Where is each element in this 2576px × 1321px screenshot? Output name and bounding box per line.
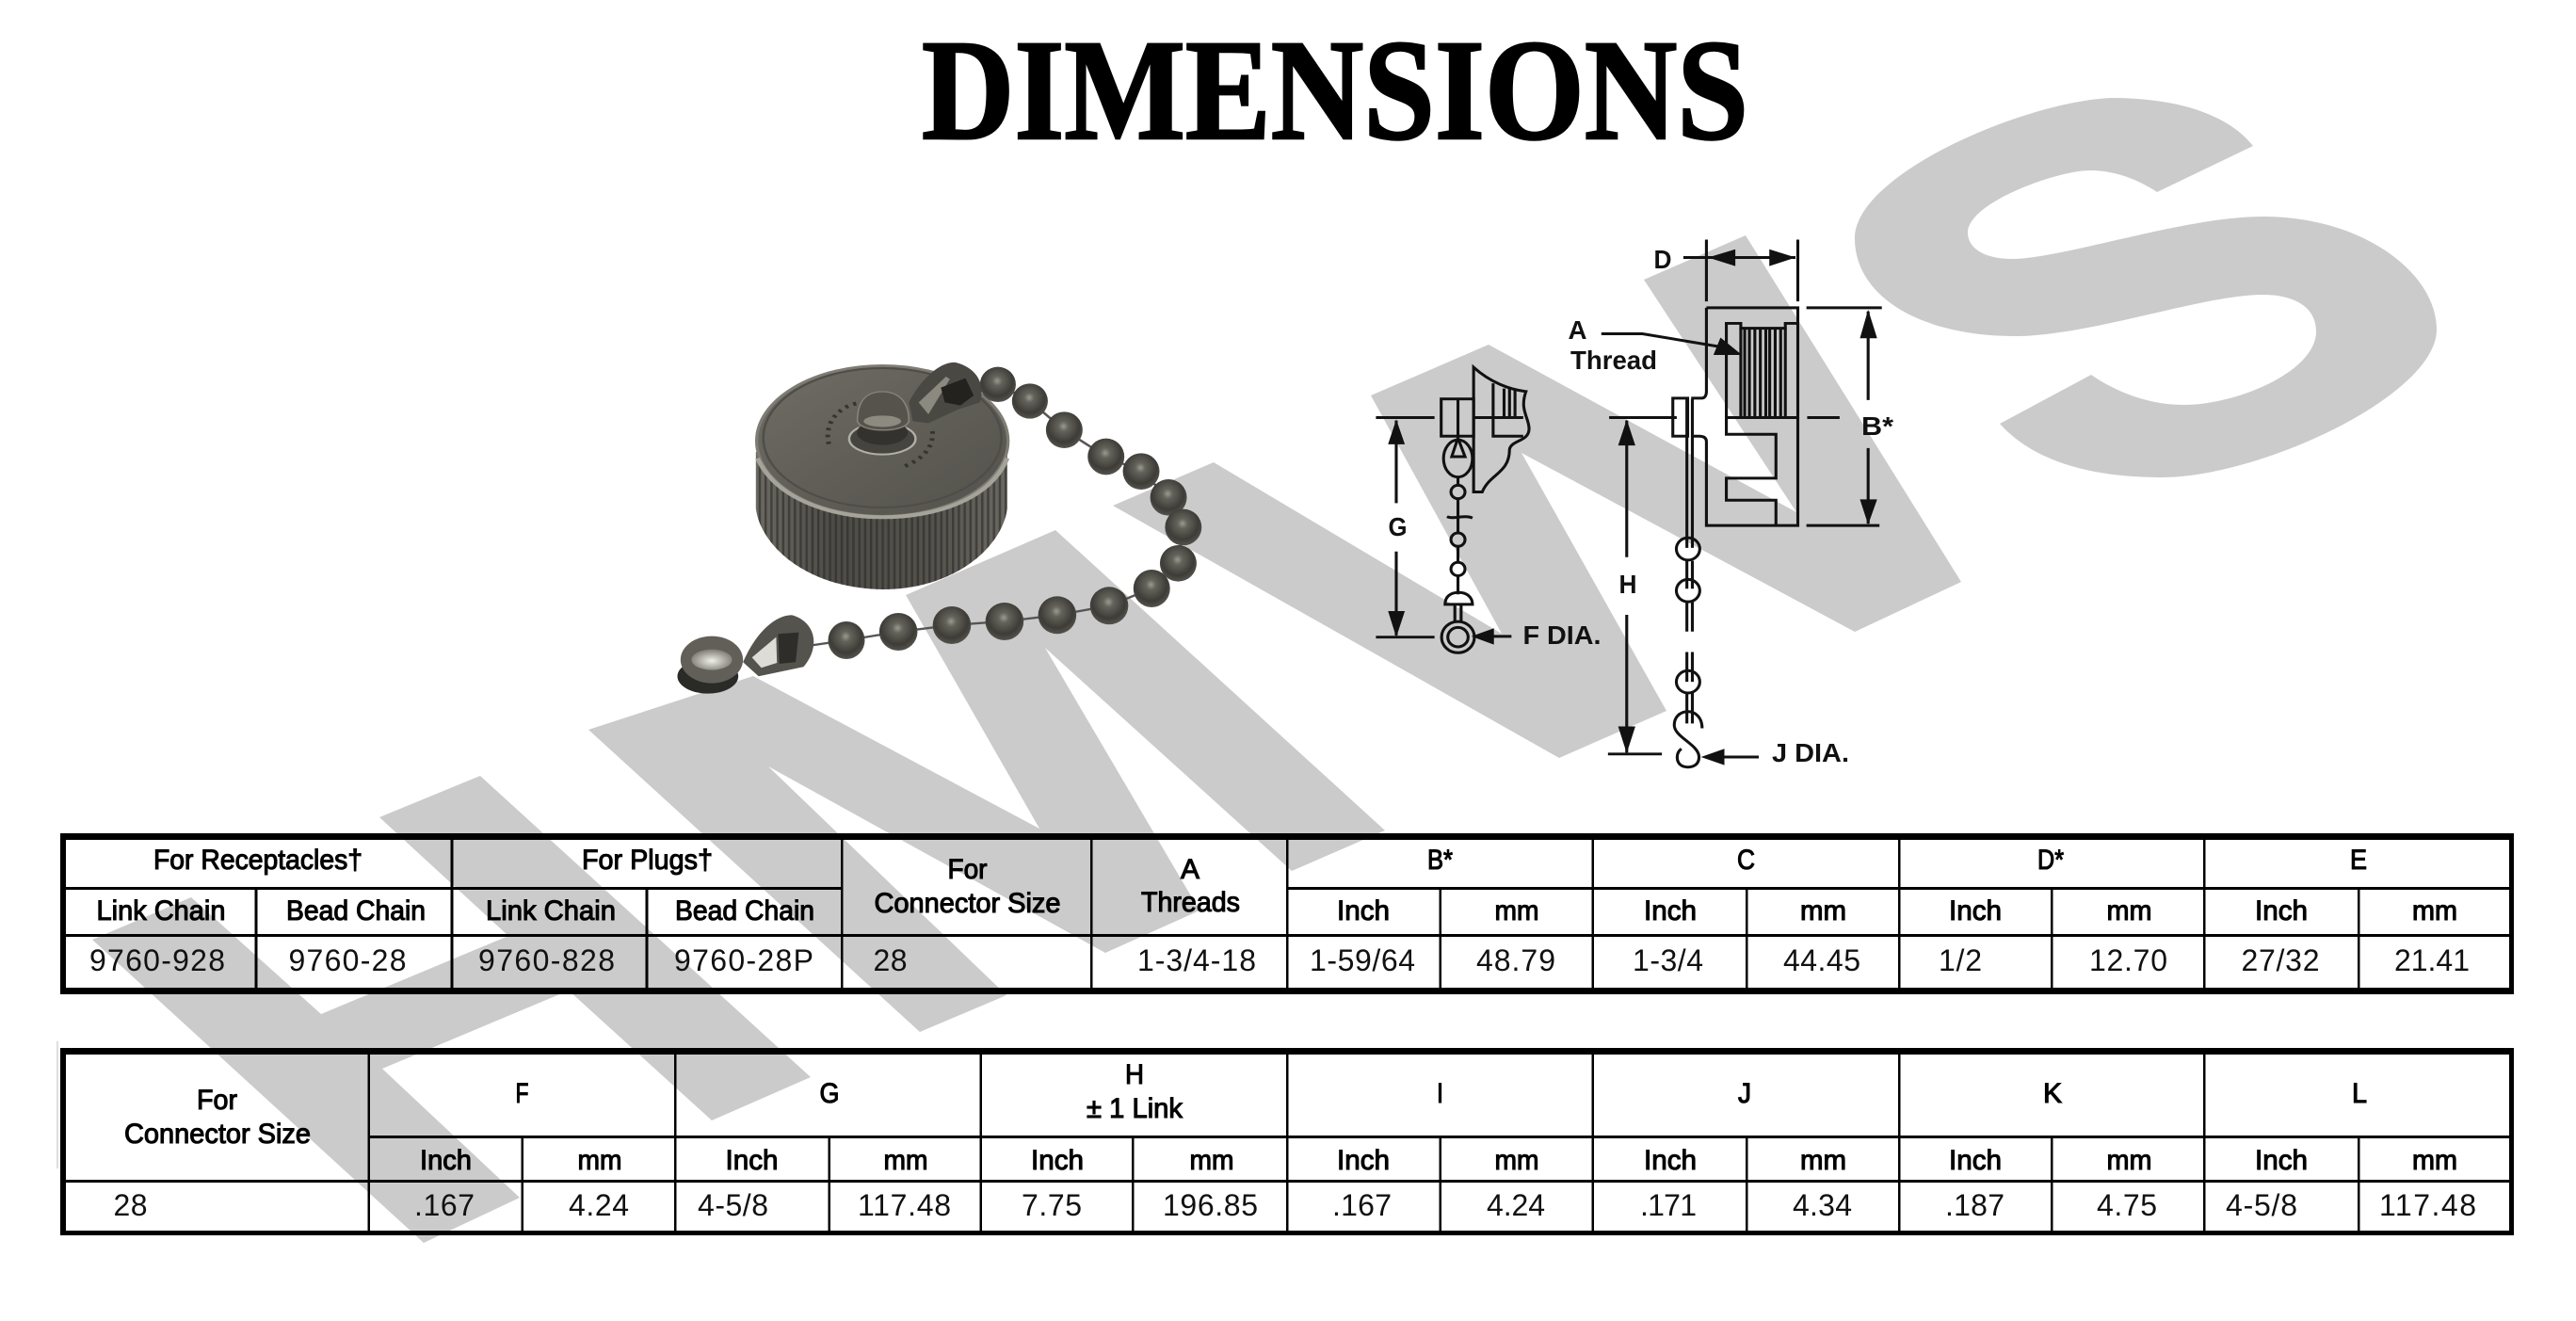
table 2 header: Inch [1644, 1145, 1697, 1176]
technical drawing: dimension diagrams [1376, 240, 1882, 767]
table 2 header: Inch [1949, 1145, 2002, 1176]
table 1 data row: 1-3/4-18 [1137, 943, 1256, 977]
table 2 data row: 117.48 [858, 1188, 951, 1222]
chain wire [803, 384, 1183, 647]
table 2 header [124, 1059, 2457, 1176]
table 2 header: Inch [2255, 1145, 2308, 1176]
table 1 data row: 44.45 [1783, 943, 1860, 977]
table 2 data row: .167 [1332, 1188, 1392, 1222]
table 2 data row: 4.24 [569, 1188, 629, 1222]
table 1 header: Bead Chain [286, 895, 426, 926]
table 2 header: H [1125, 1059, 1144, 1090]
right view: cap section with chain, dimensions A B D H J [1602, 240, 1882, 767]
table 1 header: Threads [1141, 887, 1240, 918]
table 2 header: mm [578, 1145, 621, 1176]
table 2 header: G [819, 1078, 840, 1109]
table 2 data row: 4.24 [1487, 1188, 1545, 1222]
table 1 header: Link Chain [486, 895, 616, 926]
watermark letter S [1855, 98, 2437, 477]
label G: G [1388, 512, 1407, 541]
table 2 data row [113, 1188, 2476, 1222]
table 1: part numbers and dimensions A-E [60, 833, 2514, 994]
arrow to F [1472, 628, 1511, 645]
plug body outline [1473, 367, 1529, 492]
table 1 data row: 9760-928 [89, 943, 225, 977]
table 1 data row: 1-59/64 [1310, 943, 1415, 977]
table 2 header: Inch [420, 1145, 472, 1176]
dimension H [1608, 419, 1662, 754]
table 2 data row: 4-5/8 [2226, 1188, 2297, 1222]
table 1 header: A [1181, 854, 1199, 885]
table 2 data row: .167 [414, 1188, 475, 1222]
table 2 header: K [2043, 1078, 2062, 1109]
arrow to thread A [1602, 334, 1742, 355]
ring F [1441, 621, 1474, 652]
table 2 data row: 28 [113, 1188, 147, 1222]
table 2 header: Inch [1031, 1145, 1084, 1176]
table 2 header: mm [1190, 1145, 1233, 1176]
table 1 data row: 48.79 [1476, 943, 1555, 977]
title: DIMENSIONS [922, 11, 1748, 170]
label H: H [1619, 570, 1636, 599]
cap centre post [849, 392, 915, 455]
table 2 data row: 117.48 [2379, 1188, 2476, 1222]
table 2 data row: 196.85 [1163, 1188, 1258, 1222]
table 2 header: Inch [725, 1145, 778, 1176]
table 2 header: mm [1800, 1145, 1846, 1176]
table 1 header: For Plugs† [582, 845, 713, 876]
table 1 header: E [2350, 845, 2367, 876]
label Thread: Thread [1570, 346, 1657, 375]
chain [1443, 399, 1473, 622]
table 2 header: mm [883, 1145, 928, 1176]
table 1 header: Connector Size [874, 888, 1060, 919]
cap inner section [1727, 323, 1797, 525]
label F DIA.: F DIA. [1523, 620, 1601, 650]
table 2 data row: .187 [1945, 1188, 2004, 1222]
chain beads [829, 367, 1201, 659]
chain end clip and ring [677, 615, 813, 694]
table 1 header: Bead Chain [675, 895, 814, 926]
cap knurled side [756, 452, 1007, 589]
flange and chain [1673, 398, 1702, 767]
cap outline [1691, 308, 1797, 525]
table 1 header: Inch [2255, 895, 2308, 926]
table 1 data row: 9760-828 [478, 943, 615, 977]
table 2 header: J [1738, 1078, 1751, 1109]
table 2 grid [56, 1041, 2514, 1235]
center line [1609, 414, 1840, 421]
table 1 grid [60, 833, 2514, 994]
arrow to J [1701, 749, 1759, 765]
table 2 header: For [197, 1085, 237, 1116]
label D: D [1653, 245, 1672, 274]
table 2 data row: 4-5/8 [698, 1188, 768, 1222]
table 1 header: C [1737, 845, 1755, 876]
table 2 data row: 4.75 [2097, 1188, 2157, 1222]
label B*: B* [1861, 411, 1893, 441]
watermark letter M [588, 530, 1385, 1032]
plug flange [1441, 399, 1473, 436]
table 1 header: For Receptacles† [153, 845, 362, 876]
table 1 data row: 9760-28P [674, 943, 813, 977]
table 1 header: Inch [1644, 895, 1697, 926]
left view: plug with chain, dimension G and F [1376, 367, 1529, 652]
table 2 header: Inch [1337, 1145, 1390, 1176]
table 2 header: mm [1495, 1145, 1538, 1176]
photo: connector cap with bead chain [677, 362, 1201, 694]
table 1 data row: 27/32 [2241, 943, 2320, 977]
table 1 header: For [947, 854, 988, 885]
table 1 header: mm [1495, 895, 1538, 926]
dimension B [1807, 308, 1882, 525]
table 1 data row [89, 943, 2470, 977]
table 1 data row: 28 [874, 943, 908, 977]
table 1 data row: 12.70 [2089, 943, 2167, 977]
table 2 header: L [2352, 1078, 2367, 1109]
table 1 header [96, 845, 2457, 926]
label A: A [1569, 315, 1587, 345]
table 1 header: mm [2412, 895, 2457, 926]
table 1 header: mm [1800, 895, 1846, 926]
table 1 header: Inch [1337, 895, 1390, 926]
label J DIA.: J DIA. [1772, 738, 1849, 767]
diagram labels [1388, 245, 1893, 767]
table 2 data row: 7.75 [1022, 1188, 1082, 1222]
table 1 data row: 1/2 [1939, 943, 1982, 977]
table 1 header: B* [1427, 845, 1453, 876]
table 2 header: I [1437, 1078, 1443, 1109]
dimension G [1376, 419, 1435, 637]
table 2: dimensions F-L [56, 1041, 2514, 1235]
table 1 header: Link Chain [96, 895, 226, 926]
table 2 header: mm [2412, 1145, 2457, 1176]
table 2 header: ± 1 Link [1087, 1093, 1183, 1124]
table 2 data row: 4.34 [1793, 1188, 1852, 1222]
table 2 header: F [516, 1078, 529, 1109]
cap top face [757, 365, 1008, 517]
chain clip at cap [909, 362, 982, 423]
watermark: HMWS [92, 98, 2437, 1243]
table 1 data row: 9760-28 [288, 943, 407, 977]
table 1 header: D* [2037, 845, 2064, 876]
dimension D [1683, 240, 1797, 301]
table 1 header: Inch [1949, 895, 2002, 926]
watermark letter H [92, 776, 811, 1243]
table 1 data row: 21.41 [2394, 943, 2470, 977]
table 2 header: Connector Size [124, 1119, 311, 1150]
plug thread [1493, 383, 1523, 436]
table 1 header: mm [2107, 895, 2152, 926]
table 2 data row: .171 [1640, 1188, 1697, 1222]
thread hatching [1741, 329, 1785, 417]
table 1 data row: 1-3/4 [1633, 943, 1703, 977]
table 2 header: mm [2107, 1145, 2152, 1176]
watermark letter W [1113, 235, 1961, 758]
center line [1376, 414, 1523, 421]
